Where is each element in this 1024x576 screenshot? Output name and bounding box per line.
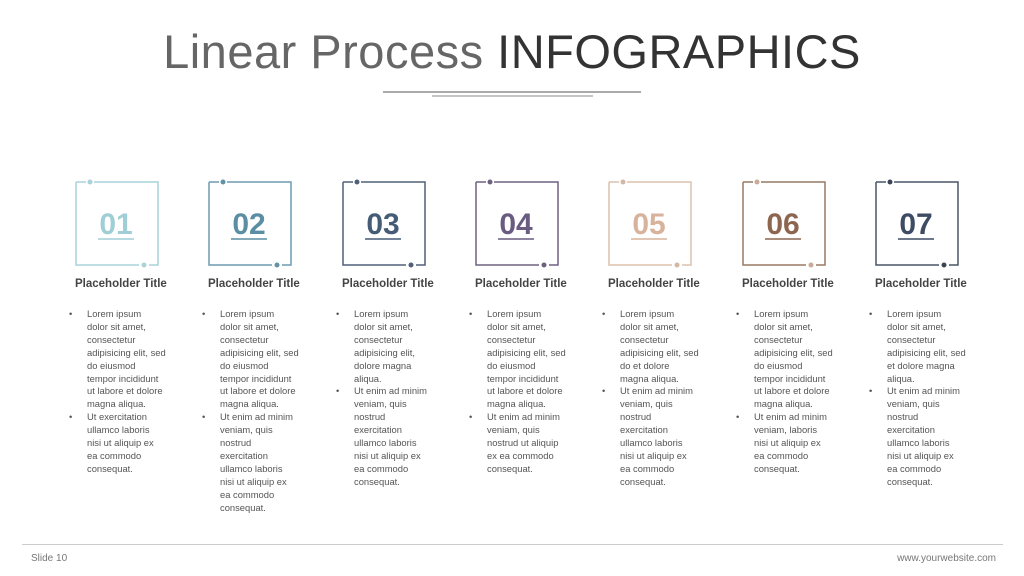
step 07 [869,180,967,487]
text block: nisi ut aliquip ex [754,437,821,448]
text block: Ut enim ad minim [887,385,960,396]
text block: ut labore et dolore [754,385,830,396]
text block: ut labore et dolore [220,385,296,396]
text block: ullamco laboris [887,437,950,448]
text block: Lorem ipsum [754,308,808,319]
text block: dolor sit amet, [354,321,413,332]
text block [736,308,833,474]
text block: Lorem ipsum [220,308,274,319]
icon: box 07: 07 [899,208,933,241]
text block: consequat. [87,463,133,474]
text block: ea commodo [87,450,141,461]
text block: magna aliqua. [754,398,813,409]
text block: consectetur [754,334,802,345]
heading: Placeholder Title [742,278,834,290]
text block: Ut enim ad minim [620,385,693,396]
text block [202,308,299,513]
step 02 [202,180,300,513]
text block: dolor sit amet, [754,321,813,332]
text block: exercitation [887,424,935,435]
text block: tempor incididunt [754,373,825,384]
text block: dolor sit amet, [220,321,279,332]
text block: do et dolore [620,360,670,371]
text block: ea commodo [887,463,941,474]
icon: box 03 [342,180,426,268]
heading: Placeholder Title [608,278,700,290]
text block: adipisicing elit, sed [620,347,699,358]
text block: Lorem ipsum [487,308,541,319]
text block: ea commodo [220,489,274,500]
text block: consequat. [220,502,266,513]
text block: ea commodo [354,463,408,474]
text block: dolor sit amet, [887,321,946,332]
text block [602,308,699,487]
heading: Placeholder Title [475,278,567,290]
text block: nostrud [887,411,918,422]
icon: box 05 [608,180,692,268]
icon: box 05: 05 [632,208,666,241]
text block: nostrud ut aliquip [487,437,558,448]
text block: nostrud [354,411,385,422]
text block: tempor incididunt [220,373,291,384]
text block: consectetur [220,334,268,345]
text block: exercitation [620,424,668,435]
text block: ea commodo [620,463,674,474]
text block: consequat. [354,476,400,487]
text block: Lorem ipsum [620,308,674,319]
text block: aliqua. [354,373,382,384]
text block: et dolore magna [887,360,955,371]
text block: consectetur [87,334,135,345]
text block: consequat. [754,463,800,474]
text block: Ut enim ad minim [354,385,427,396]
text block: dolore magna [354,360,411,371]
text block: do eiusmod [220,360,268,371]
text block: ullamco laboris [354,437,417,448]
icon: box 06 [742,180,826,268]
text block: magna aliqua. [220,398,279,409]
text block: adipisicing elit, sed [87,347,166,358]
step 03 [336,180,434,487]
text block: do eiusmod [87,360,135,371]
text block: Ut enim ad minim [220,411,293,422]
text block: tempor incididunt [487,373,558,384]
footer: website: www.yourwebsite.com [897,553,996,564]
text block: veniam, quis [620,398,673,409]
step 05 [602,180,700,487]
icon: box 06: 06 [766,208,800,241]
text block: dolor sit amet, [487,321,546,332]
text block: ut labore et dolore [487,385,563,396]
title: Linear Process INFOGRAPHICS [163,25,861,78]
text block: Lorem ipsum [87,308,141,319]
icon: box 01: 01 [99,208,133,241]
text block: adipisicing elit, [354,347,415,358]
icon: box 04 [475,180,559,268]
text block: ullamco laboris [220,463,283,474]
text block: nisi ut aliquip ex [620,450,687,461]
heading: Placeholder Title [875,278,967,290]
text block: nisi ut aliquip ex [220,476,287,487]
text block: do eiusmod [754,360,802,371]
text block: Ut exercitation [87,411,147,422]
text block: Lorem ipsum [887,308,941,319]
step 04 [469,180,567,474]
text block: magna aliqua. [87,398,146,409]
text block: veniam, quis [887,398,940,409]
icon: box 02 [208,180,292,268]
text block: consequat. [620,476,666,487]
text block: Lorem ipsum [354,308,408,319]
text block: nisi ut aliquip ex [354,450,421,461]
text block: consectetur [487,334,535,345]
text block: veniam, quis [220,424,273,435]
text block: nisi ut aliquip ex [887,450,954,461]
footer: slide number: Slide 10 [31,553,67,564]
text block [869,308,966,487]
text block [469,308,566,474]
text block: nisi ut aliquip ex [87,437,154,448]
text block: adipisicing elit, sed [887,347,966,358]
icon: box 04: 04 [499,208,533,241]
heading: Placeholder Title [342,278,434,290]
text block: exercitation [220,450,268,461]
text block: magna aliqua. [620,373,679,384]
text block: ex ea commodo [487,450,554,461]
text block: veniam, laboris [754,424,817,435]
text block: exercitation [354,424,402,435]
text block: consequat. [487,463,533,474]
icon: box 03: 03 [366,208,400,241]
text block [336,308,427,487]
title underline [383,92,641,96]
text block: magna aliqua. [487,398,546,409]
text block: ut labore et dolore [87,385,163,396]
text block: veniam, quis [487,424,540,435]
step 01 [69,180,167,474]
text block: consectetur [354,334,402,345]
icon: box 07 [875,180,959,268]
heading: Placeholder Title [75,278,167,290]
text block: consectetur [887,334,935,345]
text block: consequat. [887,476,933,487]
text block: adipisicing elit, sed [487,347,566,358]
text block: dolor sit amet, [87,321,146,332]
step 06 [736,180,834,474]
text block: consectetur [620,334,668,345]
text block: do eiusmod [487,360,535,371]
text block: nostrud [620,411,651,422]
text block: ea commodo [754,450,808,461]
text block: tempor incididunt [87,373,158,384]
text block: ullamco laboris [620,437,683,448]
text block [69,308,166,474]
text block: nostrud [220,437,251,448]
text block: dolor sit amet, [620,321,679,332]
text block: ullamco laboris [87,424,150,435]
text block: Ut enim ad minim [754,411,827,422]
text block: Ut enim ad minim [487,411,560,422]
text block: adipisicing elit, sed [754,347,833,358]
heading: Placeholder Title [208,278,300,290]
text block: adipisicing elit, sed [220,347,299,358]
text block: aliqua. [887,373,915,384]
icon: box 02: 02 [232,208,266,241]
text block: veniam, quis [354,398,407,409]
icon: box 01 [75,180,159,268]
